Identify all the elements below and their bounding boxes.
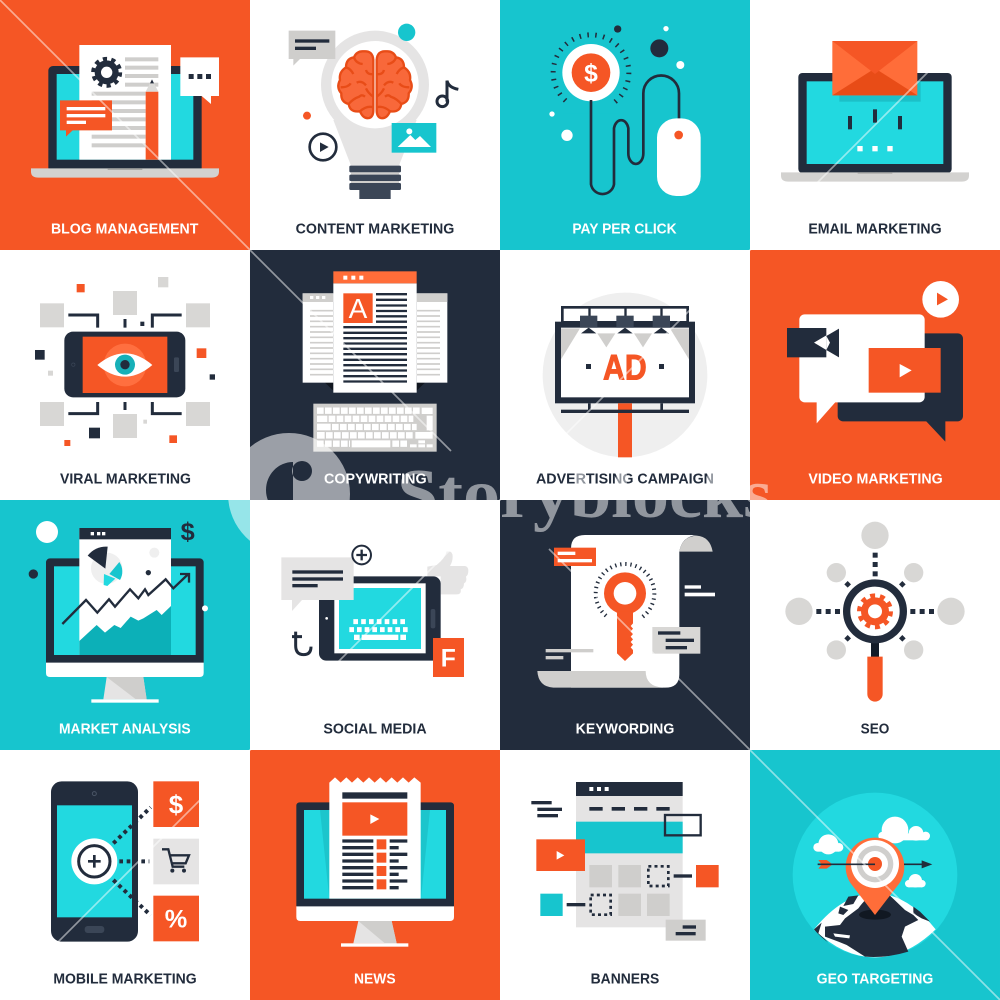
panel: geo targeting — [750, 750, 1000, 1000]
panel: market analysis — [0, 500, 250, 750]
label: NEWS — [354, 971, 396, 987]
watermark: logo — [228, 433, 350, 555]
icon: scattered squares — [35, 277, 215, 446]
icon: white lines — [685, 585, 715, 596]
label: SEO — [861, 721, 889, 737]
label: ADVERTISING CAMPAIGN — [536, 471, 714, 487]
label: GEO TARGETING — [817, 971, 933, 987]
panel: pay per click — [500, 0, 750, 250]
icon: arrow — [818, 860, 932, 869]
icon: main document — [333, 271, 417, 393]
icon: clouds — [813, 817, 930, 887]
panel: viral marketing — [35, 277, 215, 487]
icon: percent tile: % — [165, 905, 187, 933]
panel: email marketing — [781, 41, 969, 237]
panel: seo — [785, 522, 965, 737]
label: EMAIL MARKETING — [808, 221, 942, 237]
icon: keyboard — [313, 404, 437, 452]
label: CONTENT MARKETING — [296, 221, 454, 237]
icon: play button — [310, 134, 336, 160]
label: MARKET ANALYSIS — [59, 721, 191, 737]
icon: mouse cable — [591, 75, 679, 194]
icon: paper scroll — [537, 535, 713, 688]
icon: percent tile — [153, 896, 199, 941]
panel: news — [250, 750, 500, 1000]
icon: decorative dots — [549, 25, 684, 141]
icon: trend line arrow — [62, 574, 189, 624]
icon: white speech bubble — [799, 314, 925, 423]
icon: grey note — [666, 920, 706, 941]
icon: plus circle — [352, 546, 371, 564]
icon: dollar tile — [153, 781, 199, 827]
panel: copywriting — [250, 250, 500, 500]
panel: video marketing — [750, 250, 1000, 500]
icon: network nodes — [785, 522, 965, 660]
icon: orange speech bubble — [60, 100, 112, 137]
label: PAY PER CLICK — [572, 221, 677, 237]
label: SOCIAL MEDIA — [323, 721, 427, 737]
icon: video banner — [536, 839, 585, 871]
icon: navy speech bubble — [838, 333, 963, 442]
icon: white speech bubble — [180, 57, 219, 104]
icon: thumbs up — [427, 551, 468, 594]
icon: dollar coin with ticks: $ — [584, 60, 598, 87]
icon: grey note — [652, 627, 700, 654]
panel: banners — [531, 782, 719, 987]
label: COPYWRITING — [324, 471, 427, 487]
label: VIDEO MARKETING — [808, 471, 943, 487]
icon: dollar tile: $ — [169, 789, 184, 819]
panel: content marketing — [289, 24, 458, 237]
icon: target pin — [846, 838, 904, 915]
icon: dollar coin with ticks — [553, 35, 629, 113]
panel: social media — [281, 546, 468, 737]
icon: report page — [79, 528, 171, 655]
icon: orange dot — [303, 112, 311, 120]
icon: facebook box — [433, 638, 464, 677]
panel: mobile marketing — [51, 781, 199, 987]
icon: ticks and dots — [848, 109, 902, 151]
panel: blog management — [0, 0, 250, 250]
icon: speech bubble — [289, 31, 335, 66]
icon: play circle — [922, 281, 959, 318]
icon: monitor — [296, 802, 454, 947]
icon: text lines — [531, 801, 562, 817]
icon: cart tile — [153, 839, 199, 884]
icon: picture — [392, 123, 436, 153]
icon: main document: A — [349, 293, 368, 324]
icon: dollar sign: $ — [181, 518, 195, 546]
icon: connectors — [816, 553, 934, 642]
icon: brain — [338, 51, 412, 118]
icon: video camera — [787, 328, 839, 357]
icon: teal square — [540, 894, 585, 916]
icon: phone with eye — [64, 332, 185, 397]
label: BLOG MANAGEMENT — [51, 221, 198, 237]
icon: teal dot — [398, 24, 415, 41]
icon: envelope — [832, 41, 917, 95]
icon: globe — [814, 893, 936, 957]
icon: monitor — [46, 558, 204, 703]
icon: dots — [29, 521, 208, 611]
icon: speech bubble — [281, 557, 354, 611]
icon: side documents — [303, 293, 447, 391]
icon: facebook box: F — [441, 646, 456, 673]
icon: billboard: AD — [603, 348, 647, 387]
icon: dotted connectors — [113, 807, 151, 915]
icon: document with gear — [79, 45, 171, 160]
icon: web page — [576, 782, 683, 927]
icon: backdrop circle — [543, 293, 707, 457]
icon: pencil — [146, 79, 158, 160]
icon: orange square — [674, 865, 719, 887]
icon: laptop — [31, 66, 219, 178]
icon: orange label — [554, 548, 596, 566]
icon: phone — [51, 781, 138, 942]
icon: outlined banner — [665, 815, 701, 835]
icon: tumblr t — [292, 632, 311, 655]
icon: news receipt — [329, 777, 421, 899]
icon: light bulb — [321, 31, 429, 199]
label: KEYWORDING — [576, 721, 674, 737]
panel: advertising campaign — [536, 293, 714, 487]
label: BANNERS — [591, 971, 660, 987]
icon: music note — [437, 81, 458, 107]
watermark: wordmark: Storyblocks — [397, 456, 772, 533]
panel: keywording — [500, 500, 750, 750]
icon: tablet — [319, 576, 441, 661]
icon: billboard — [555, 307, 695, 457]
label: VIRAL MARKETING — [60, 471, 191, 487]
icon: magnifier with gear — [847, 583, 903, 702]
icon: brackets — [68, 315, 182, 414]
icon: grey lines — [546, 649, 593, 659]
icon: video player — [869, 348, 941, 393]
icon: laptop — [781, 73, 969, 182]
icon: key — [596, 564, 654, 661]
icon: backdrop circle — [793, 793, 957, 957]
icon: mouse — [657, 118, 701, 196]
label: MOBILE MARKETING — [53, 971, 197, 987]
